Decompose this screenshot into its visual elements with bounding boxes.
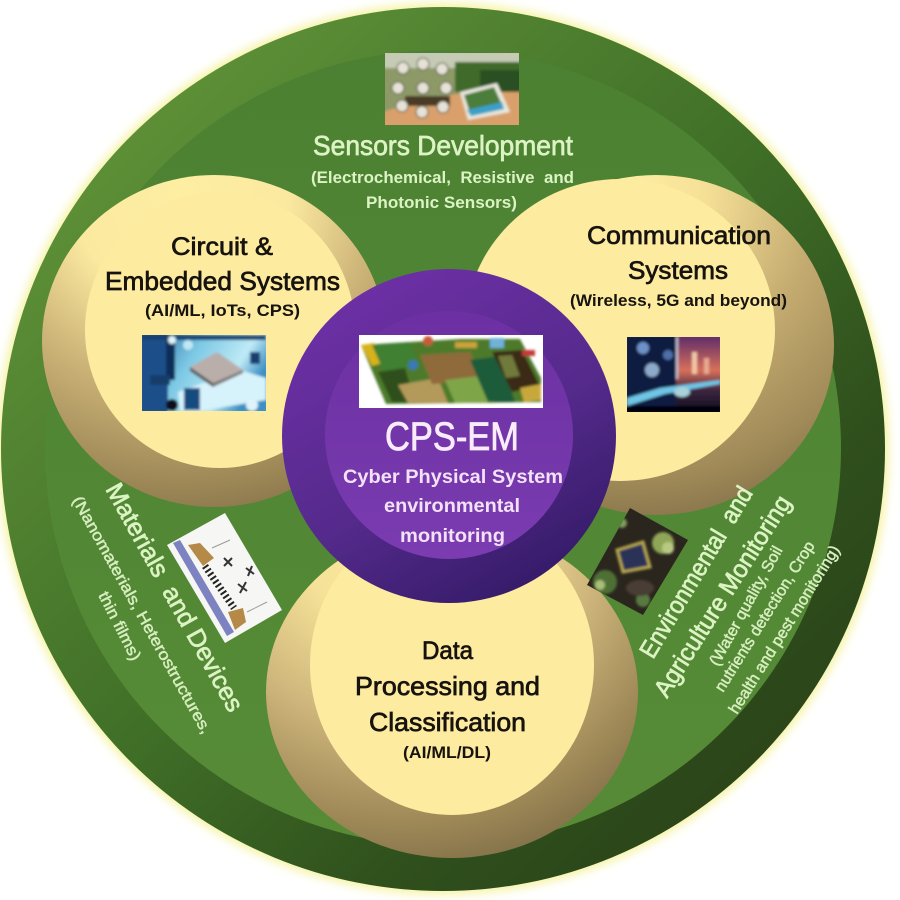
image: isometric smart farm xyxy=(359,335,543,408)
heading: circuit and embedded systems: Circuit & xyxy=(171,233,273,261)
heading: communication systems: Systems xyxy=(628,257,728,285)
image: smart city network xyxy=(625,335,722,414)
image: soil sensor chip among plants xyxy=(587,508,688,615)
description: sensor types: (Electrochemical, Resistive and xyxy=(311,168,574,187)
heading: communication systems: Communication xyxy=(587,222,771,250)
heading: environmental and agriculture monitoring: Environmental and xyxy=(634,482,759,663)
subtitle: cyber physical system environmental monitoring xyxy=(343,467,563,547)
heading: materials and devices: Materials and Devices xyxy=(100,478,249,717)
description: monitoring targets: (Water quality, Soil xyxy=(707,543,786,669)
cream inner circle: circuit xyxy=(85,192,355,468)
description: monitoring targets: nutrients detection, Crop xyxy=(712,538,819,695)
heading: circuit and embedded systems: Embedded Systems xyxy=(105,266,340,296)
heading: data processing and classification: Processing and xyxy=(355,671,540,701)
heading: communication systems xyxy=(570,222,787,310)
subtitle: cyber physical system environmental monitoring: environmental xyxy=(384,496,520,517)
panel: data processing and classification xyxy=(266,515,638,858)
heading: environmental and agriculture monitoring: Agriculture Monitoring xyxy=(648,490,797,702)
cream inner circle: communication xyxy=(465,179,775,481)
heading: data processing and classification: Classification xyxy=(369,707,526,737)
heading: circuit and embedded systems xyxy=(105,233,340,320)
image: nano device diagram xyxy=(167,513,282,643)
image: circuit board xyxy=(140,333,268,413)
heading: sensors development: Sensors Development xyxy=(313,130,573,161)
description: sensor types: Photonic Sensors) xyxy=(366,193,517,212)
description: materials: (Nanomaterials, Heterostructures, xyxy=(69,494,214,737)
subtitle: cyber physical system environmental monitoring: Cyber Physical System xyxy=(343,467,563,488)
panel: communication systems xyxy=(465,175,834,515)
inner green disc xyxy=(45,50,841,846)
heading: data processing and classification xyxy=(355,637,540,762)
heading: communication systems: (Wireless, 5G and beyond) xyxy=(570,291,787,310)
subtitle: cyber physical system environmental monitoring: monitoring xyxy=(400,526,505,547)
panel: central CPS-EM circle xyxy=(282,269,616,603)
panel: circuit and embedded systems xyxy=(42,175,386,507)
panel: environmental and agriculture monitoring xyxy=(580,482,844,717)
heading: data processing and classification: Data xyxy=(422,637,473,665)
title: CPS-EM: CPS-EM xyxy=(385,415,519,459)
panel: sensors development xyxy=(311,51,574,212)
heading: data processing and classification: (AI/ML/DL) xyxy=(403,743,491,762)
description: sensor types xyxy=(311,168,574,212)
heading: circuit and embedded systems: (AI/ML, IoTs, CPS) xyxy=(145,301,300,320)
cream inner circle: data processing xyxy=(310,515,594,815)
inner purple circle xyxy=(325,311,573,559)
description: materials: thin films) xyxy=(94,589,144,664)
panel: materials and devices xyxy=(69,478,282,737)
image: sensors in greenhouse xyxy=(383,51,521,127)
description: monitoring targets: health and pest monitoring) xyxy=(726,543,844,717)
